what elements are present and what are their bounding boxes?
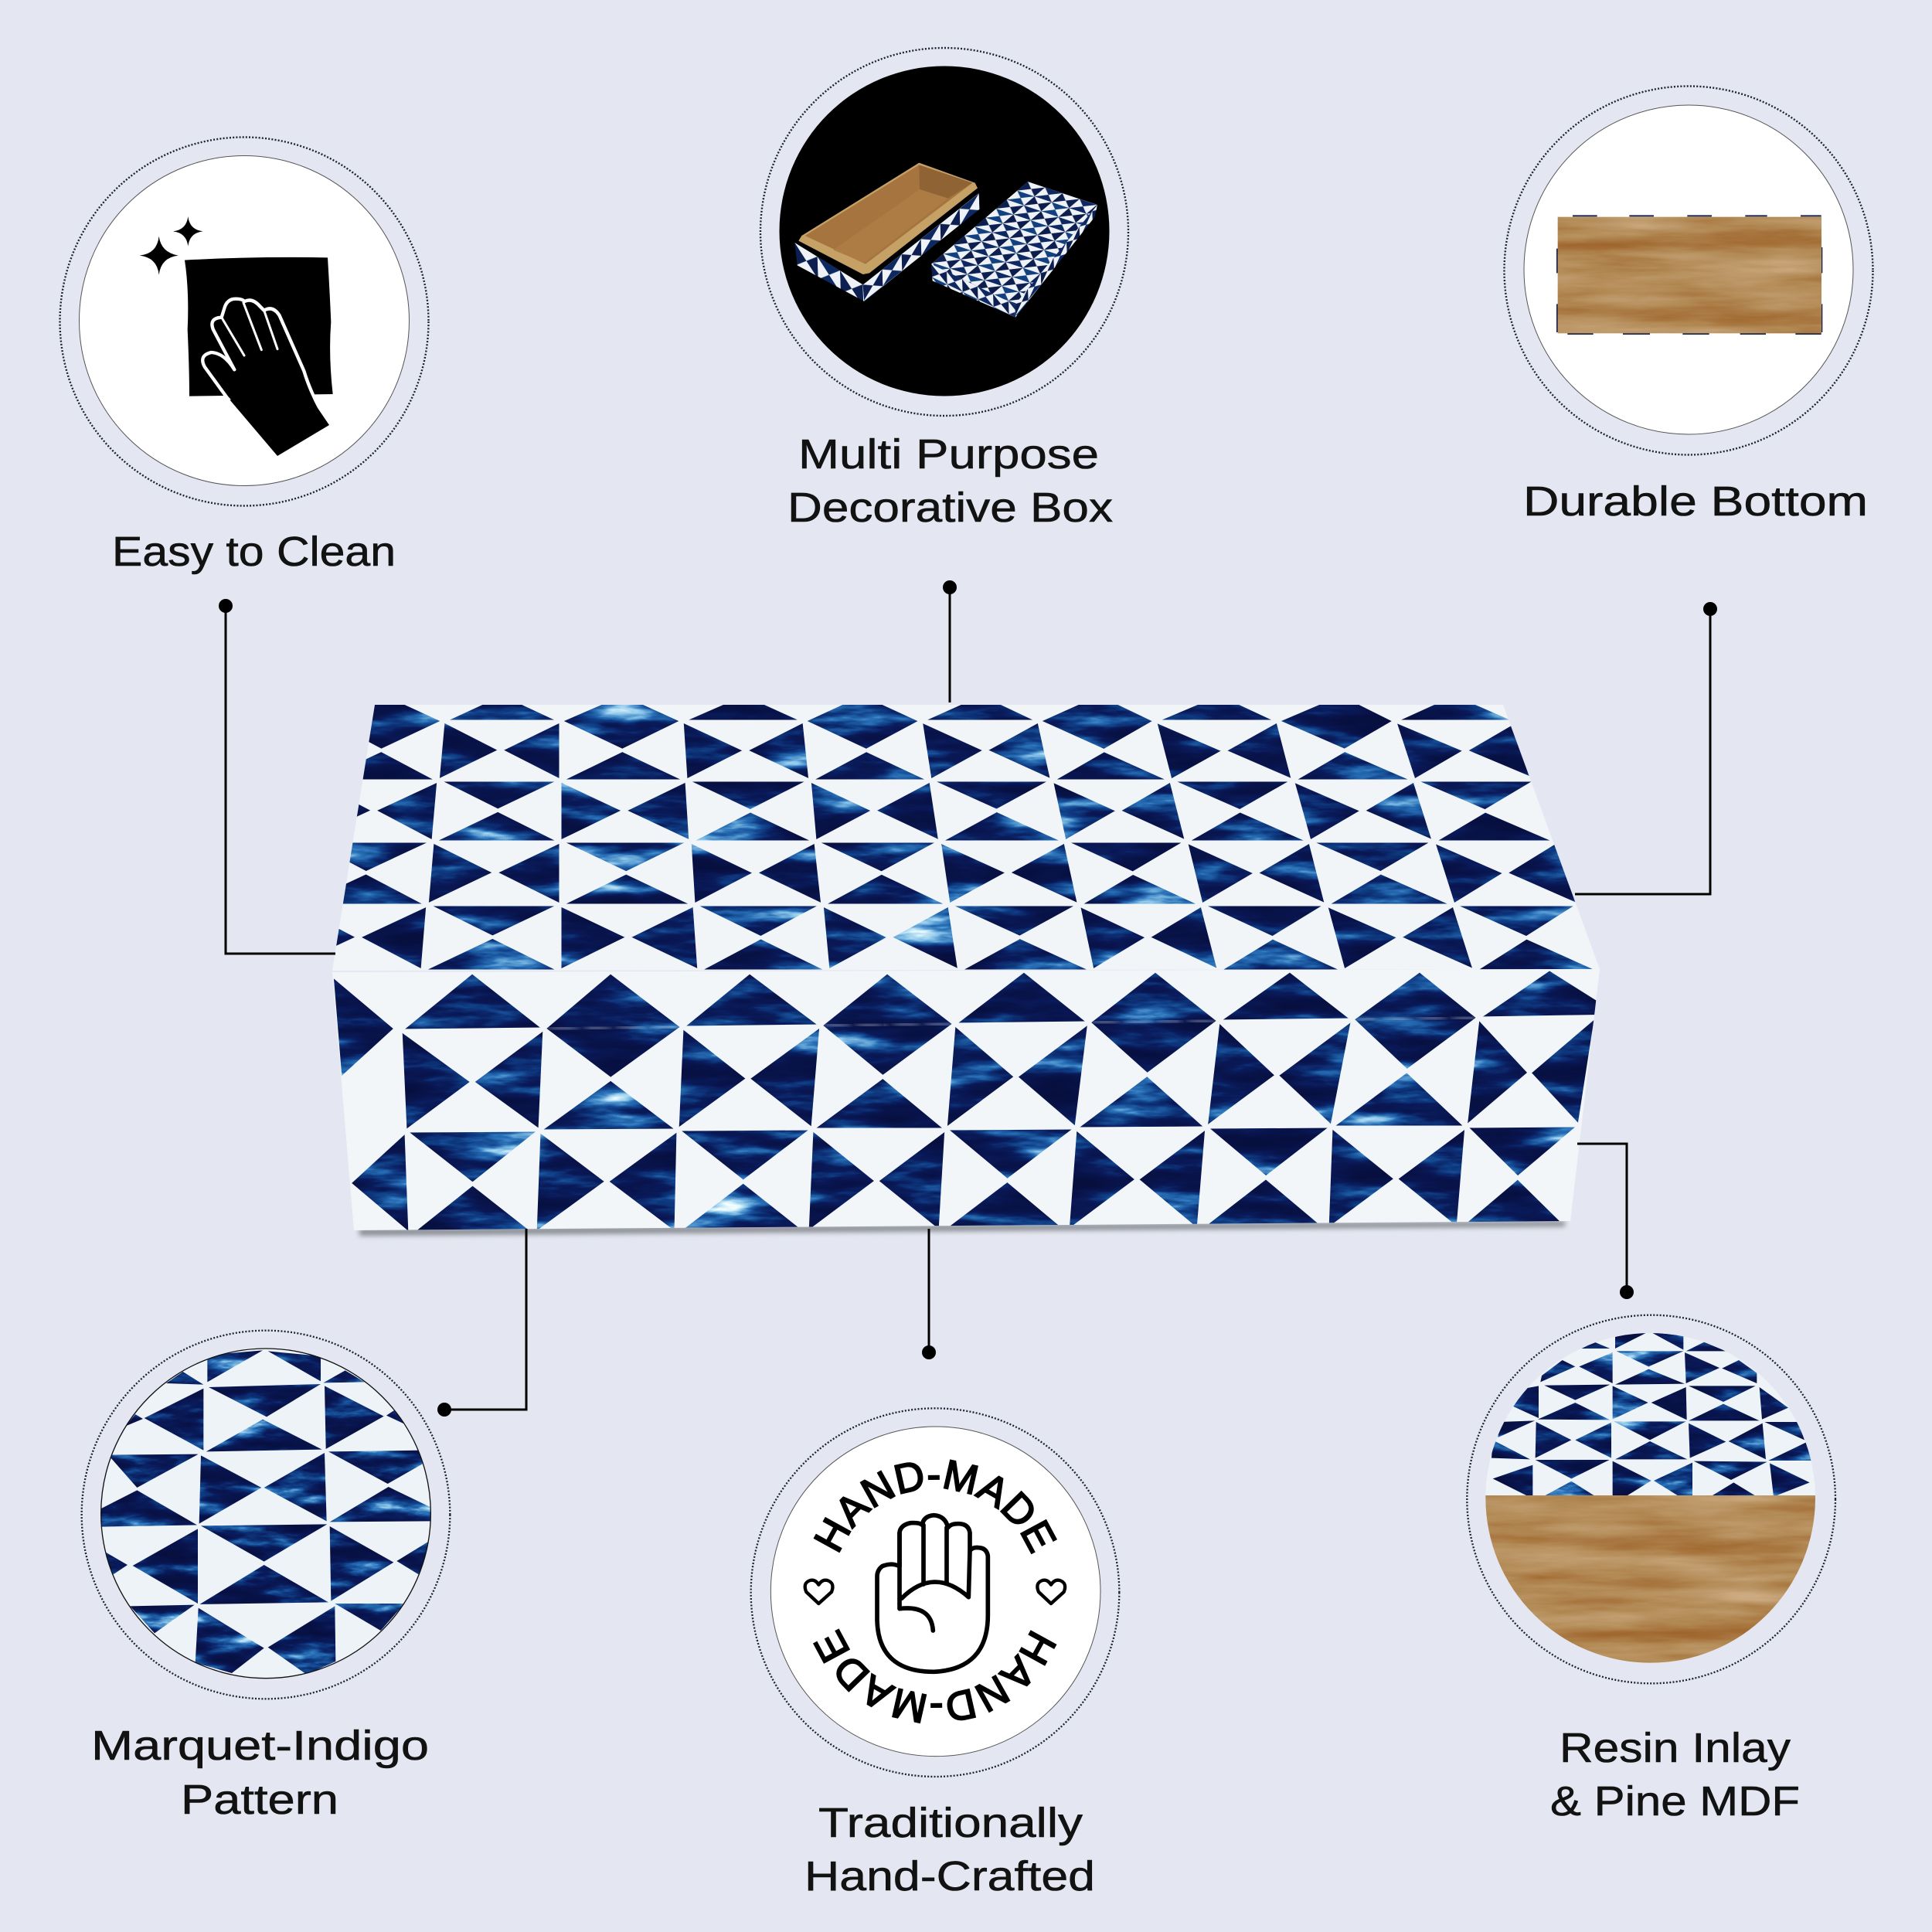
panel: resin inlay and pine MDF bbox=[1467, 1315, 1835, 1683]
box lid top face bbox=[332, 705, 1600, 971]
black disc bbox=[779, 66, 1110, 396]
label: Traditionally Hand-Crafted bbox=[804, 1800, 1095, 1900]
pine wood half bbox=[1484, 1495, 1818, 1665]
icon: hand wiping with cloth and sparkles bbox=[140, 216, 333, 456]
photo: pine wood base bbox=[1557, 216, 1821, 334]
box shadow bbox=[359, 1221, 1565, 1236]
dotted ring bbox=[751, 1408, 1119, 1777]
label: Marquet-Indigo Pattern: Pattern bbox=[181, 1777, 338, 1823]
panel: durable bottom bbox=[1504, 87, 1873, 454]
label: Durable Bottom: Durable Bottom bbox=[1523, 478, 1868, 525]
label: Resin Inlay & Pine MDF bbox=[1550, 1725, 1800, 1825]
connector: Multi Purpose bbox=[943, 580, 957, 702]
icon: hearts bbox=[805, 1580, 1065, 1604]
dotted ring bbox=[1467, 1315, 1835, 1683]
panel: easy to clean bbox=[60, 138, 428, 505]
photo: open box and lid bbox=[794, 163, 1097, 318]
panel: hand-crafted bbox=[750, 1407, 1121, 1777]
badge text bottom: HAND-MADE bbox=[813, 1628, 1057, 1723]
label: Easy to Clean: Easy to Clean bbox=[112, 529, 396, 575]
dotted ring bbox=[760, 48, 1128, 416]
dotted ring bbox=[60, 138, 428, 505]
label: Multi Purpose Decorative Box: Multi Purpose bbox=[798, 431, 1099, 478]
label: Multi Purpose Decorative Box: Decorative Box bbox=[787, 485, 1113, 531]
box front face bbox=[325, 966, 1623, 1236]
main product: marquetry box bbox=[287, 694, 1623, 1236]
panel: marquet-indigo pattern bbox=[82, 1331, 450, 1699]
connector: Hand-Crafted bbox=[922, 1229, 936, 1359]
label: Resin Inlay & Pine MDF: Resin Inlay bbox=[1560, 1725, 1791, 1771]
white disc bbox=[1524, 105, 1853, 434]
icon: raised hand bbox=[877, 1515, 988, 1672]
panel: hand-crafted: HAND-MADE bbox=[813, 1459, 1057, 1555]
dotted ring bbox=[1504, 87, 1873, 454]
label: Marquet-Indigo Pattern bbox=[91, 1723, 429, 1823]
label: Marquet-Indigo Pattern: Marquet-Indigo bbox=[91, 1723, 429, 1769]
dotted ring bbox=[82, 1331, 450, 1699]
connector: Resin Inlay bbox=[1577, 1144, 1634, 1299]
badge text top bbox=[832, 1488, 1038, 1591]
panel: multi purpose bbox=[760, 48, 1128, 416]
connector: Easy to Clean bbox=[219, 599, 335, 954]
split disc bbox=[1484, 1332, 1818, 1665]
label: Multi Purpose Decorative Box bbox=[787, 431, 1113, 531]
white disc bbox=[79, 156, 410, 485]
label: Traditionally Hand-Crafted: Hand-Crafted bbox=[804, 1853, 1095, 1900]
white disc bbox=[770, 1427, 1100, 1757]
pattern close-up disc bbox=[98, 1345, 435, 1682]
connector: Marquet-Indigo bbox=[437, 1229, 526, 1417]
label: Resin Inlay & Pine MDF: & Pine MDF bbox=[1550, 1778, 1800, 1825]
connector: Durable Bottom bbox=[1575, 602, 1717, 894]
disc border bbox=[101, 1349, 430, 1679]
label: Traditionally Hand-Crafted: Traditionally bbox=[818, 1800, 1083, 1846]
